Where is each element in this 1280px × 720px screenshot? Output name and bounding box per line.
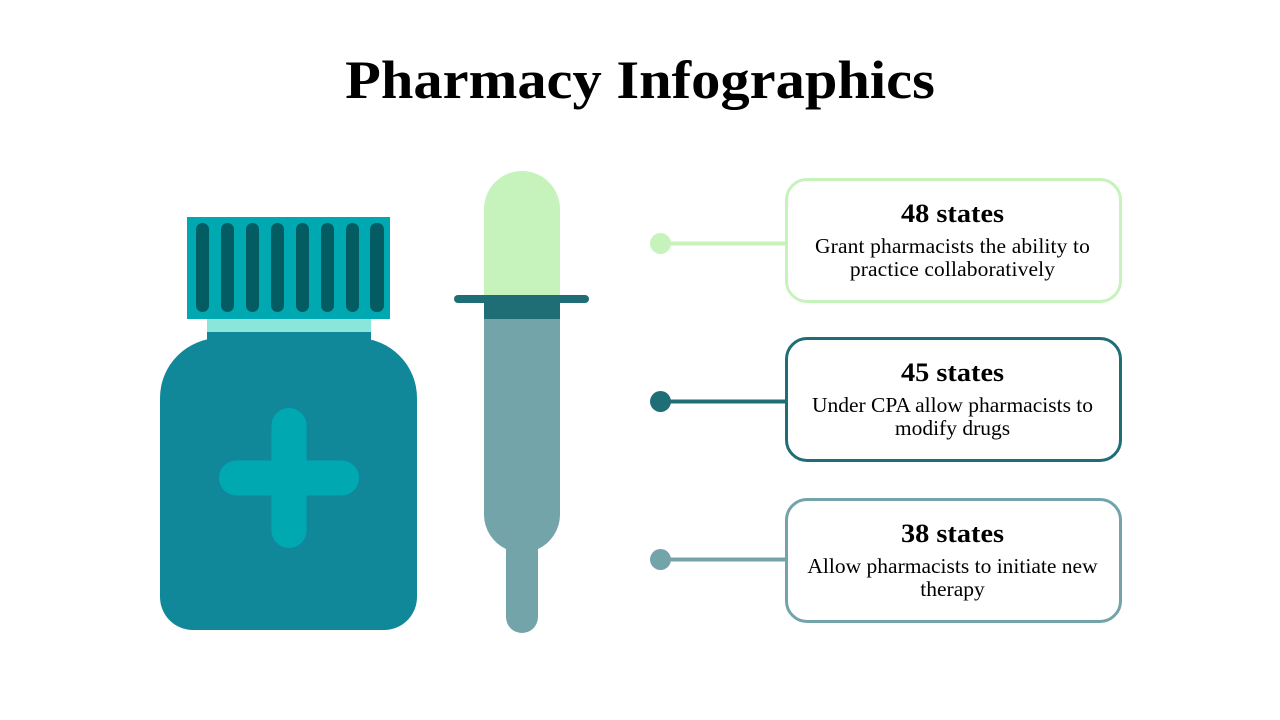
panel: 45 states: 45 states [901, 358, 1004, 387]
panel: 45 states [785, 337, 1122, 462]
panel: 48 states: Grant pharmacists the ability to [815, 234, 1090, 258]
panel: 38 states: 38 states [901, 519, 1004, 548]
panel: 48 states: practice collaboratively [850, 257, 1055, 281]
panel: 38 states: therapy [920, 577, 985, 601]
icon: medicine bottle [160, 217, 417, 630]
panel: 48 states: 48 states [901, 199, 1004, 228]
panel: 38 states [785, 498, 1122, 623]
panel: 48 states [785, 178, 1122, 303]
panel: 45 states: Under CPA allow pharmacists to [812, 393, 1093, 417]
panel: 45 states: modify drugs [895, 416, 1010, 440]
connector: 45 states [650, 391, 787, 412]
icon: dropper [454, 171, 589, 633]
panel: 38 states: Allow pharmacists to initiate new [807, 554, 1098, 578]
connector: 48 states [650, 233, 787, 254]
connector: 38 states [650, 549, 787, 570]
title: Pharmacy Infographics [345, 50, 935, 110]
